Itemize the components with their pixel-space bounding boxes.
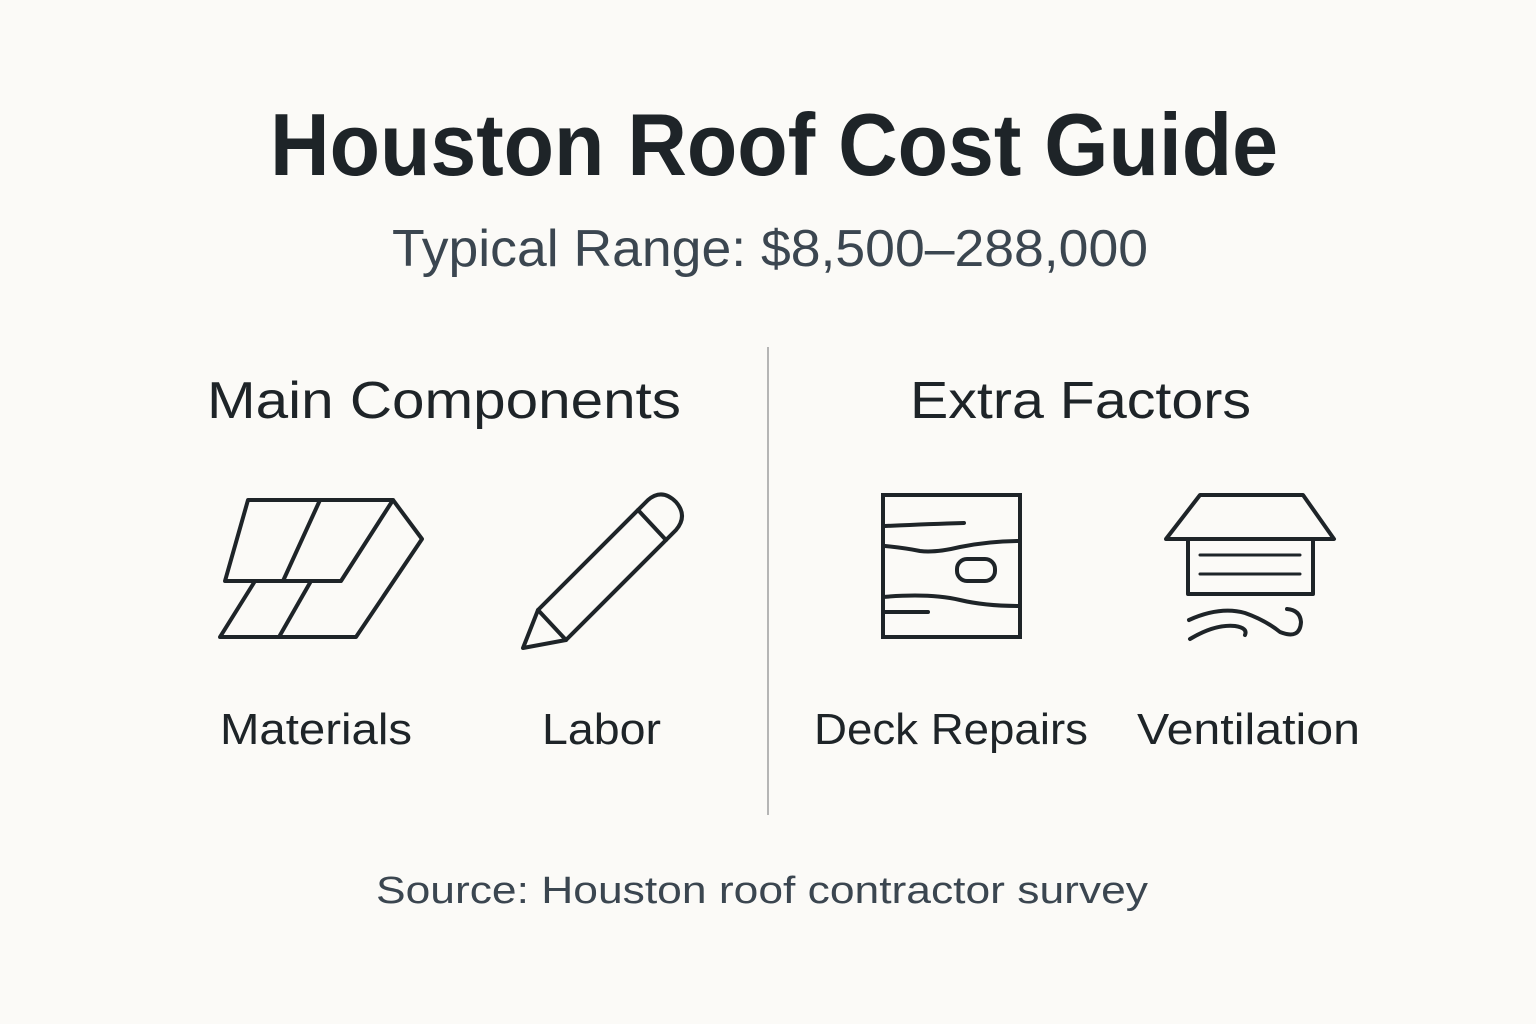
- subtitle: typical range: Typical Range: $8,500–288,000: [392, 220, 1148, 278]
- divider: [767, 347, 769, 815]
- label: ventilation: Ventilation: [1137, 705, 1360, 754]
- label: deck repairs: Deck Repairs: [814, 705, 1088, 754]
- heading: main components: Main Components: [207, 372, 681, 430]
- icon: pencil (labor): [523, 494, 682, 648]
- source note: Source: Houston roof contractor survey: [376, 870, 1148, 912]
- icon: shingles (materials): [220, 500, 422, 637]
- title: Houston Roof Cost Guide: [270, 95, 1278, 194]
- label: materials: Materials: [220, 705, 412, 754]
- heading: extra factors: Extra Factors: [910, 372, 1251, 430]
- icon: deck board: [883, 495, 1020, 637]
- icon: ventilation: [1166, 495, 1334, 639]
- label: labor: Labor: [542, 705, 661, 754]
